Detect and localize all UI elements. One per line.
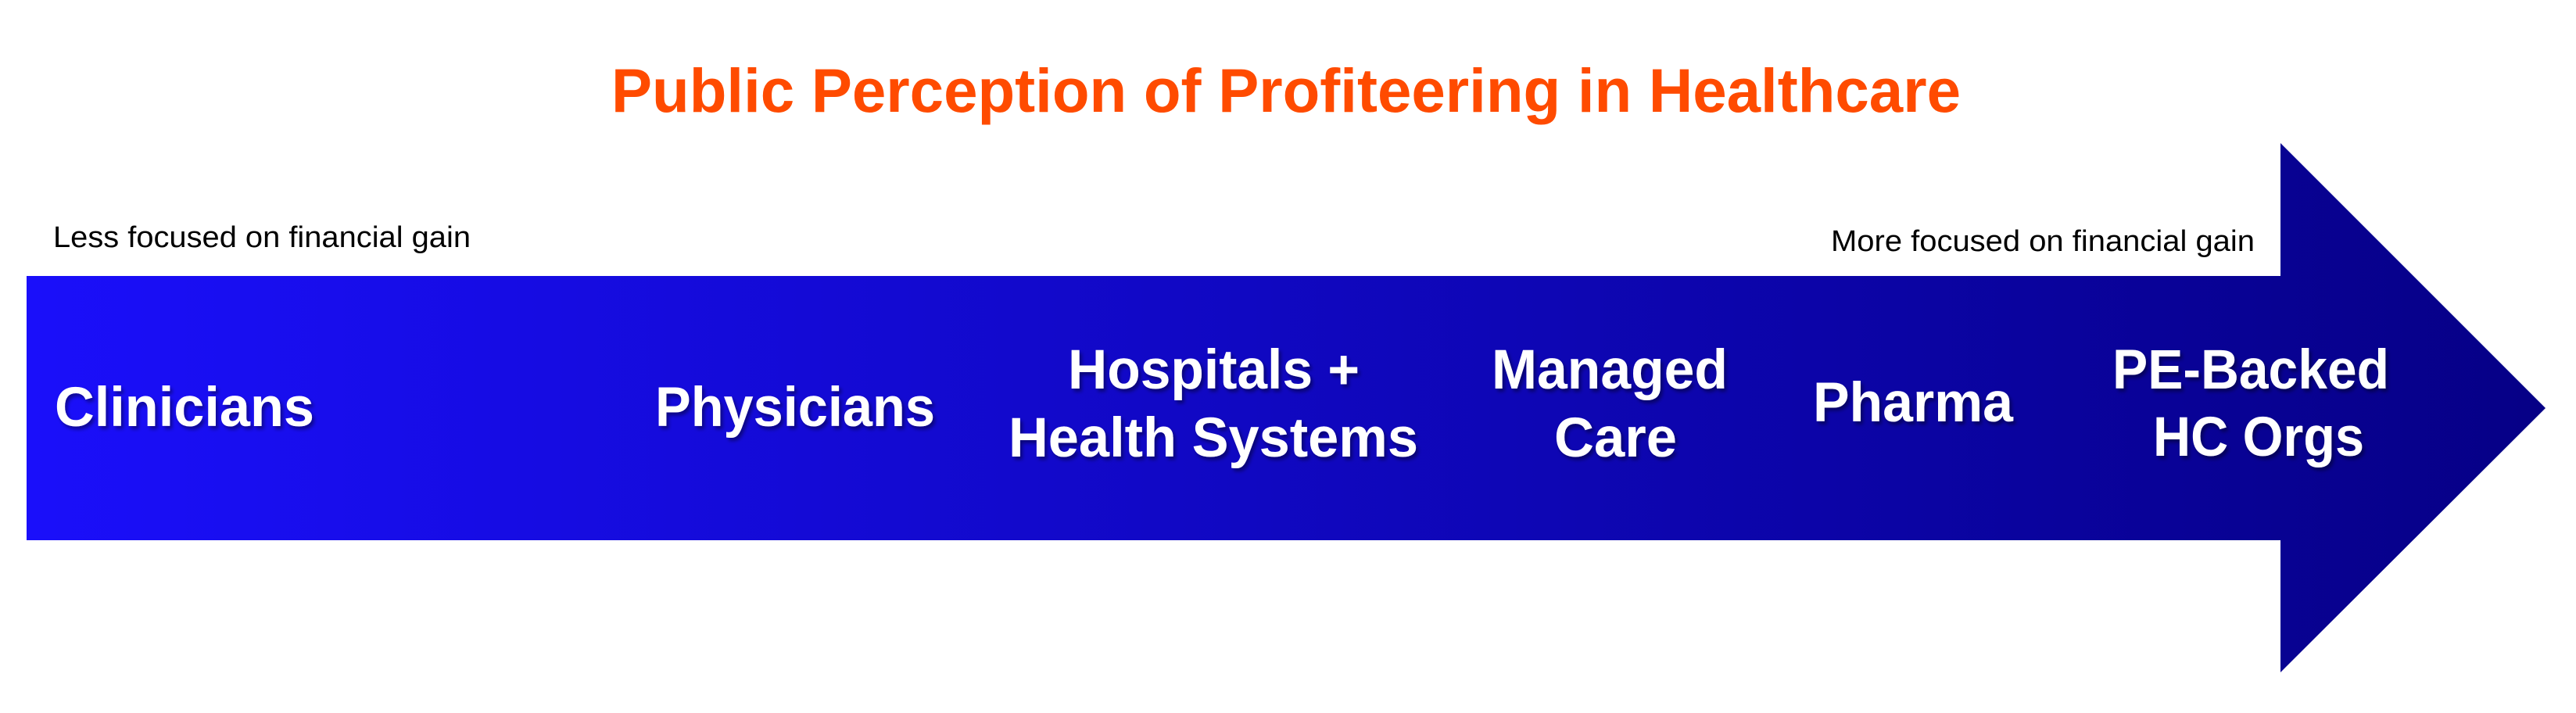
label: pharma: Pharma xyxy=(1813,372,2013,434)
title: Public Perception of Profiteering in Healthcare xyxy=(611,56,1961,125)
label: managed care: Managed xyxy=(1492,339,1728,401)
label: hospitals + health systems: Health Systems xyxy=(1009,407,1418,469)
label: managed care xyxy=(1492,339,1728,469)
right scale label: More focused on financial gain xyxy=(1831,225,2255,258)
label: pe-backed hc orgs: HC Orgs xyxy=(2153,407,2364,468)
arrow labels xyxy=(55,339,2389,469)
left scale label: Less focused on financial gain xyxy=(53,221,471,254)
label: pe-backed hc orgs xyxy=(2112,339,2389,468)
arrow xyxy=(27,143,2546,672)
label: hospitals + health systems xyxy=(1009,339,1418,469)
label: clinicians: Clinicians xyxy=(55,377,314,439)
label: managed care: Care xyxy=(1554,407,1677,469)
label: hospitals + health systems: Hospitals + xyxy=(1068,339,1360,401)
label: pe-backed hc orgs: PE-Backed xyxy=(2112,339,2389,401)
label: physicians: Physicians xyxy=(655,377,935,439)
